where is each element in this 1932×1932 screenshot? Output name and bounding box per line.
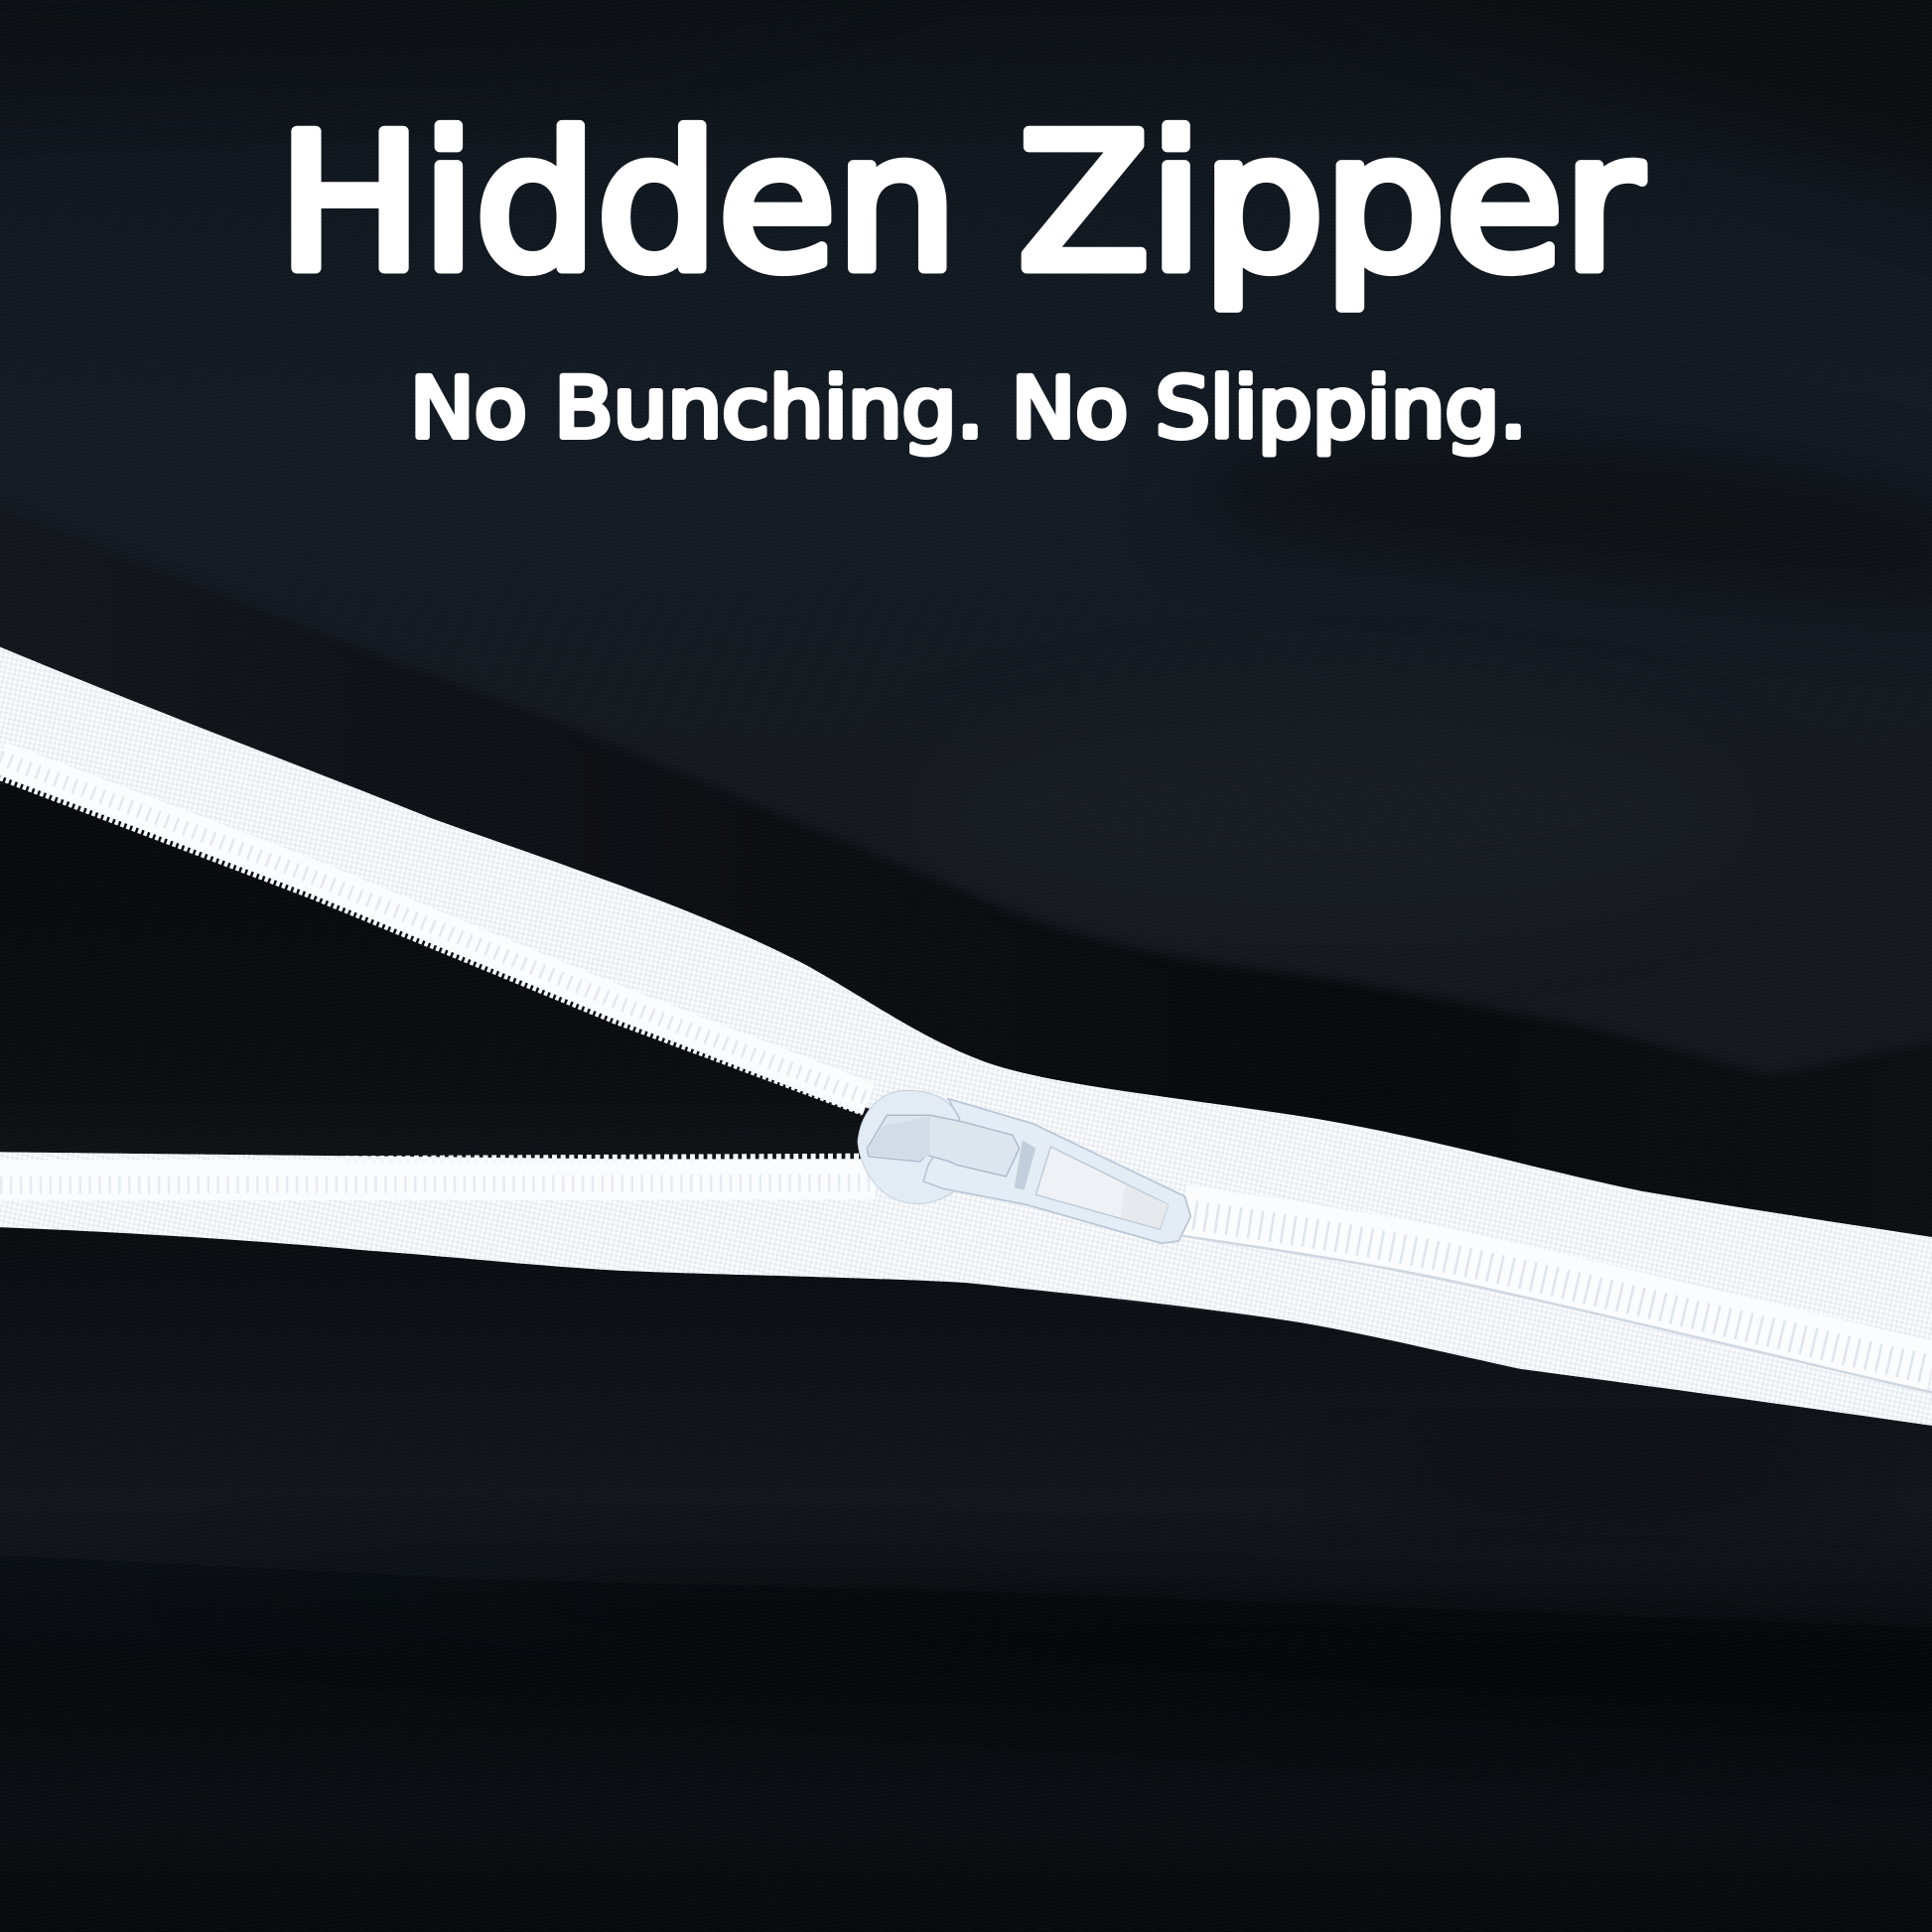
upper fabric hem: [0, 502, 1932, 1257]
slider base: [858, 1090, 966, 1203]
title: Hidden Zipper: [278, 94, 1642, 313]
zipper teeth: right: [1182, 1210, 1932, 1392]
icon: zipper slider and pull: [858, 1090, 1190, 1243]
zipper pull: [923, 1099, 1190, 1243]
zipper teeth: upper left: [0, 758, 869, 1113]
lower flap: [0, 1213, 1932, 1627]
bottom fabric: [0, 1555, 1932, 1932]
slider cap: [867, 1115, 1020, 1176]
opening behind the zipper: [0, 763, 888, 1182]
subtitle: No Bunching. No Slipping.: [410, 359, 1527, 457]
panel: zipper: [0, 647, 1932, 1426]
zipper teeth: lower left: [0, 1157, 875, 1185]
zipper tape: [0, 647, 1932, 1426]
